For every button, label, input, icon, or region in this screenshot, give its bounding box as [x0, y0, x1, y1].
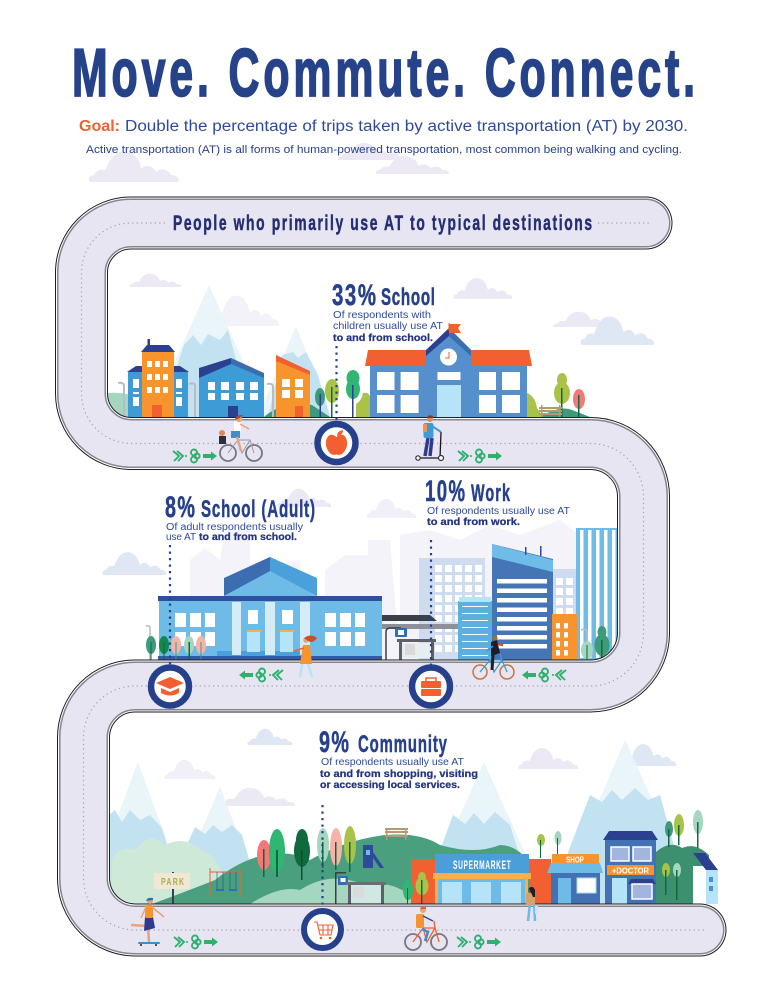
person: scooter rider [416, 415, 444, 460]
title: Move. Commute. Connect. [72, 36, 695, 112]
park trees [257, 826, 562, 880]
person: cyclist in helmet [405, 906, 447, 950]
person: cyclist commuter [473, 636, 514, 679]
shop [547, 854, 603, 904]
winding road [82, 223, 704, 930]
campus trees [146, 626, 610, 661]
playground slide [363, 845, 384, 868]
downtown buildings [419, 528, 617, 660]
apartment building [127, 339, 189, 417]
stat: 9% community [319, 726, 478, 791]
scene 2: campus and downtown [102, 489, 617, 661]
dotted callout leaders [170, 346, 431, 909]
person: walking woman [294, 636, 317, 677]
stat: 33% school: 33% [332, 279, 376, 312]
person: cyclist with child [219, 415, 262, 461]
clouds [129, 274, 654, 345]
stat: 33% school: Of respondents with [333, 310, 431, 321]
road bike-lane markers [173, 450, 566, 948]
park hills [112, 834, 550, 904]
stat: 9% community: Of respondents usually use AT [321, 757, 464, 768]
stat: 10% work: to and from work. [427, 517, 520, 528]
person: skateboarder [131, 898, 164, 946]
stat: 9% community: 9% [319, 726, 349, 759]
stat: 33% school [332, 279, 443, 344]
school building [365, 323, 532, 417]
park sign: PARK [161, 876, 185, 887]
stat: 10% work: Work [471, 480, 511, 507]
stat: 9% community: to and from shopping, visiting [320, 769, 478, 780]
stat: 33% school: children usually use AT [333, 321, 443, 332]
stat: 8% school adult: 8% [165, 491, 195, 524]
trees [315, 370, 590, 417]
stat: 10% work [425, 475, 570, 528]
scene 3: park and shops [85, 729, 718, 904]
lamps [118, 383, 273, 417]
skyline [190, 520, 585, 660]
stat: 9% community: Community [358, 732, 447, 758]
shop: SHOP [566, 856, 585, 864]
stat: 8% school adult: Of adult respondents usually [166, 522, 303, 533]
bench [539, 405, 562, 417]
supermarket: SUPERMARKET [453, 859, 511, 873]
icon: graduation cap [151, 668, 189, 706]
clouds [102, 489, 416, 575]
road heading: People who primarily use AT to typical destinations [173, 211, 592, 235]
end house [693, 853, 718, 904]
goal statement: Goal: [79, 118, 120, 135]
supermarket [403, 854, 551, 904]
stat: 8% school adult: to and from school. [199, 532, 297, 543]
stat: 10% work: Of respondents usually use AT [427, 506, 570, 517]
doctor office [603, 810, 709, 904]
header clouds [89, 143, 449, 182]
definition text: Active transportation (AT) is all forms of human-powered transportation, most common being walking and cycling. [86, 144, 682, 156]
orange house [276, 355, 310, 417]
mountains [85, 740, 700, 904]
bus stop [335, 872, 386, 904]
goal statement: Double the percentage of trips taken by active transportation (AT) by 2030. [125, 118, 688, 135]
stat: 9% community: or accessing local services. [320, 780, 460, 791]
swing set [210, 868, 240, 897]
icon: briefcase [412, 668, 450, 706]
scene 1: neighbourhood and school [108, 274, 654, 417]
stat: 33% school: School [381, 285, 435, 311]
stat: 8% school adult: use AT [166, 532, 196, 543]
park sign [154, 872, 190, 904]
clouds [164, 729, 676, 806]
doctor office: +DOCTOR [612, 866, 649, 876]
stat: 8% school adult [165, 491, 315, 543]
icon: apple [318, 424, 356, 462]
campus building [158, 557, 382, 660]
bus stop [382, 615, 458, 660]
mountains [108, 285, 332, 417]
stat: 33% school: to and from school. [333, 333, 433, 344]
stat: 8% school adult: School (Adult) [201, 497, 315, 523]
hill bench [385, 828, 408, 840]
icon: shopping cart [304, 911, 341, 948]
stat: 10% work: 10% [425, 475, 465, 508]
person: woman with bag [526, 887, 538, 921]
blue house [199, 358, 264, 417]
